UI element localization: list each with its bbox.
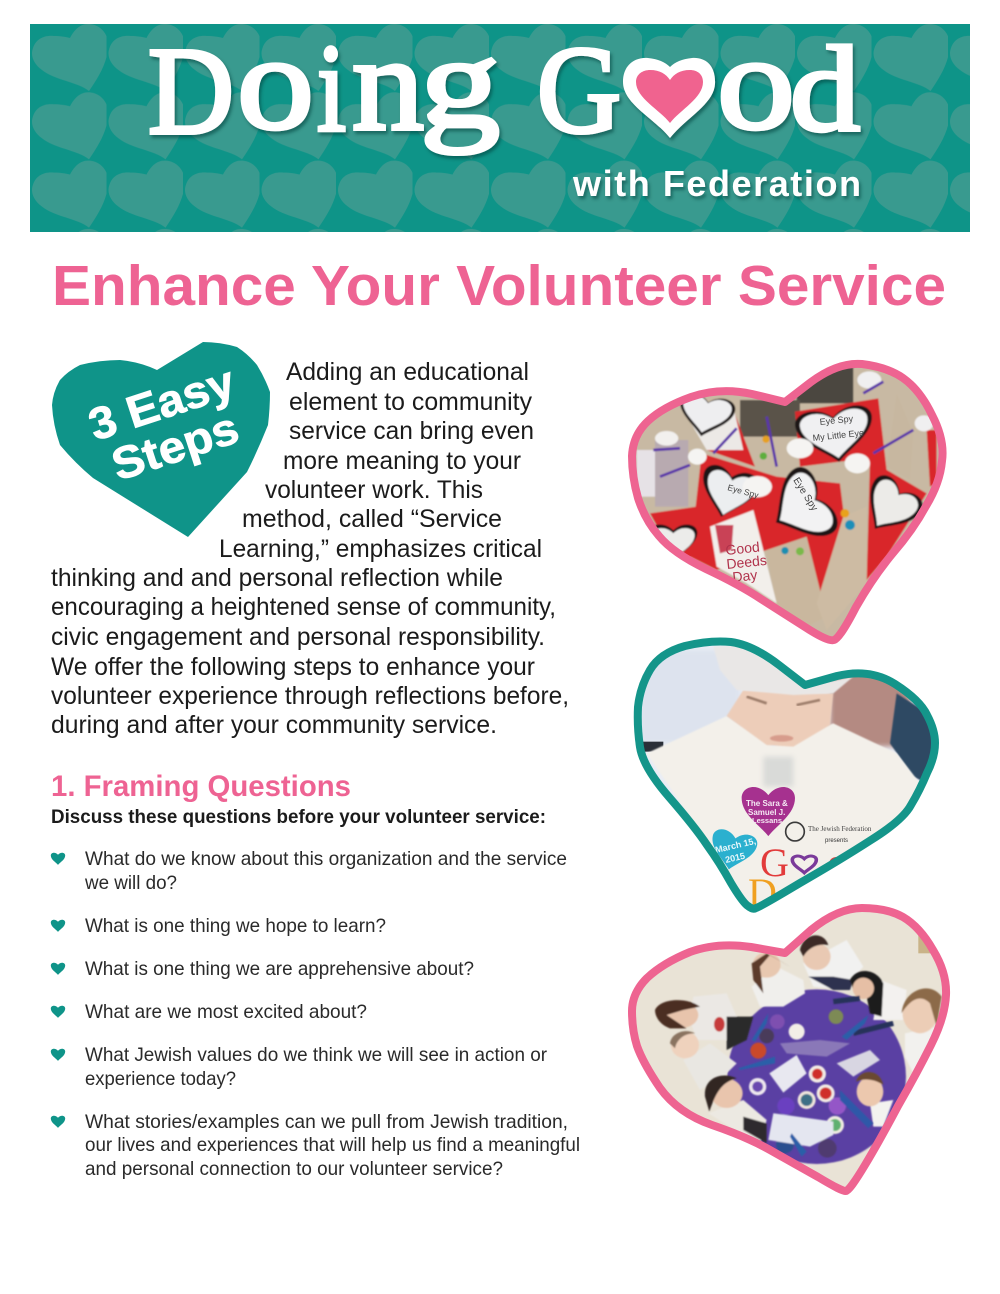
question 6	[51, 1112, 580, 1180]
photo heart 2: boy in T-shirt: 2015	[724, 851, 746, 865]
question 6: our lives and experiences that will help us find a meaningful	[85, 1135, 580, 1156]
intro paragraph: volunteer experience through reflections before,	[51, 683, 569, 710]
banner subtitle: with Federation	[572, 163, 861, 204]
person: left woman	[655, 993, 753, 1050]
photo heart 3: group at purple table	[620, 900, 960, 1200]
banner title: Doing Good: o	[717, 9, 795, 158]
photo heart 2: boy in T-shirt: o	[780, 870, 800, 915]
question 2: What is one thing we hope to learn?	[85, 916, 386, 937]
banner	[30, 9, 970, 232]
intro paragraph: Learning,” emphasizes critical	[219, 536, 542, 563]
person: boy right	[856, 1072, 893, 1127]
question 6: and personal connection to our volunteer service?	[85, 1159, 503, 1180]
question 6: What stories/examples can we pull from Jewish tradition,	[85, 1112, 568, 1133]
photo heart 2: boy in T-shirt: G	[760, 840, 789, 885]
person: top centre woman	[752, 952, 805, 1007]
photo heart 2: boy in T-shirt: Samuel J.	[748, 808, 785, 817]
banner title: Doing Good: d	[790, 22, 860, 157]
intro paragraph	[51, 359, 569, 739]
banner title: Doing Good	[148, 9, 860, 161]
badge: 3 Easy Steps heart: 3 Easy	[82, 356, 241, 451]
intro paragraph: method, called “Service	[242, 506, 502, 533]
main heading: Enhance Your Volunteer Service	[52, 254, 946, 318]
photo heart 1: Eye Spy bottles: My Little Eye	[812, 428, 864, 443]
photo heart 2: boy in T-shirt: presents	[825, 838, 848, 844]
banner title: Doing Good: i	[317, 20, 346, 158]
person: left girl	[670, 1031, 737, 1090]
question 4: What are we most excited about?	[85, 1002, 367, 1023]
intro paragraph: civic engagement and personal responsibility.	[51, 624, 545, 651]
section intro line: Discuss these questions before your volunteer service:	[51, 806, 546, 828]
intro paragraph: element to community	[289, 389, 533, 416]
photo heart 1: Eye Spy bottles: Day	[732, 566, 758, 585]
banner title: Doing Good: g	[420, 11, 500, 155]
banner title: Doing Good: o	[237, 9, 314, 158]
photo heart 2: boy in T-shirt: Lessans	[752, 816, 782, 825]
banner title: Doing Good: G	[537, 22, 621, 160]
section heading: Framing Questions: 1. Framing Questions	[51, 770, 351, 803]
question list	[51, 849, 580, 1180]
question 1: we will do?	[84, 873, 177, 894]
intro paragraph: Adding an educational	[286, 359, 529, 386]
photo heart 2: boy in T-shirt	[634, 638, 939, 913]
question 5: experience today?	[85, 1069, 236, 1090]
badge: 3 Easy Steps heart: Steps	[105, 402, 245, 491]
table items	[738, 1009, 880, 1158]
photo heart 2: boy in T-shirt: D	[748, 870, 777, 915]
question 5: What Jewish values do we think we will see in action or	[85, 1045, 548, 1066]
person: far right woman	[902, 988, 942, 1073]
question 1: What do we know about this organization and the service	[85, 849, 567, 870]
person: right girl	[833, 971, 907, 1033]
intro paragraph: thinking and and personal reflection while	[51, 565, 503, 592]
photo heart 2: boy in T-shirt: o	[827, 840, 847, 885]
photo heart 1: Eye Spy bottles: Eye Spy	[790, 476, 820, 513]
banner title: Doing Good: n	[352, 10, 424, 159]
intro paragraph: during and after your community service.	[51, 712, 497, 739]
person: top right adult	[800, 935, 863, 990]
intro paragraph: encouraging a heightened sense of community,	[51, 594, 556, 621]
photo heart 1: Eye Spy bottles: Good	[725, 538, 760, 558]
banner title: Doing Good: D	[148, 23, 234, 161]
photo heart 2: boy in T-shirt: March 15,	[714, 836, 757, 855]
photo heart 1: Eye Spy bottles: Eye Spy	[726, 482, 760, 500]
photo heart 2: boy in T-shirt: The Jewish Federation	[808, 825, 872, 833]
badge: 3 Easy Steps heart	[52, 342, 270, 537]
intro paragraph: more meaning to your	[283, 448, 521, 475]
person: bottom-left child	[705, 1076, 767, 1143]
photo heart 2: boy in T-shirt: The Sara &	[746, 799, 788, 808]
question 5	[51, 1045, 548, 1090]
question 3: What is one thing we are apprehensive about?	[85, 959, 474, 980]
photo heart 1: Eye Spy bottles: Deeds	[726, 552, 768, 572]
intro paragraph: service can bring even	[289, 418, 534, 445]
question 1	[51, 849, 567, 894]
intro paragraph: volunteer work. This	[265, 477, 483, 504]
intro paragraph: We offer the following steps to enhance your	[51, 654, 535, 681]
photo heart 1: Eye Spy bottles: Eye Spy	[819, 413, 854, 427]
photo heart 1: Eye Spy bottles	[628, 360, 947, 644]
